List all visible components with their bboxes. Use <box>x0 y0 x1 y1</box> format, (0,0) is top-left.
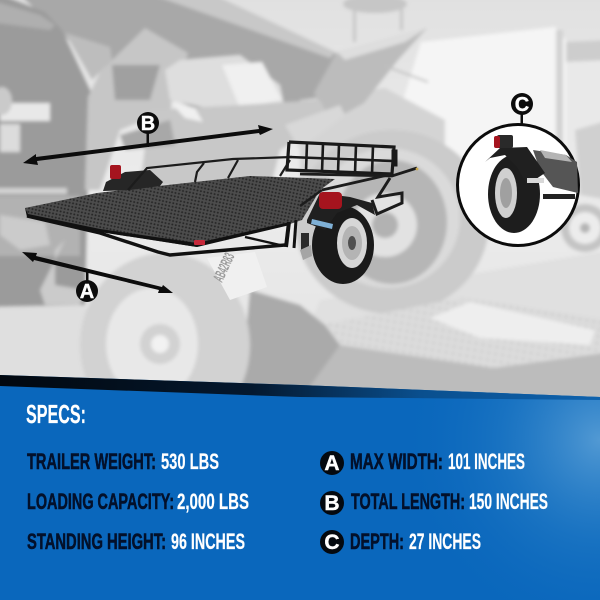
right wheel <box>312 206 374 284</box>
background photo: motorcycle scene <box>0 0 600 437</box>
badge A: A <box>80 281 94 303</box>
red tail light <box>319 192 342 209</box>
spec: trailer weight: TRAILER WEIGHT: <box>27 449 156 474</box>
palm tree <box>343 0 407 42</box>
front deck <box>25 193 290 247</box>
rear deck <box>97 176 335 224</box>
blue sticker <box>311 219 333 229</box>
inset tail light <box>494 135 513 148</box>
spec C: depth: 27 INCHES <box>409 529 481 554</box>
licence plate <box>207 250 267 300</box>
motorcycle body <box>85 28 188 190</box>
hitch coupler <box>300 233 312 260</box>
spec A: max width <box>320 449 525 475</box>
arrow B <box>23 112 273 165</box>
spec: standing height: 96 INCHES <box>171 529 245 554</box>
badge C <box>511 93 533 116</box>
foreground foggy tyre <box>80 253 250 437</box>
ramp with diamond plate <box>322 298 600 368</box>
spec B: total length: TOTAL LENGTH: <box>351 489 465 514</box>
heading: SPECS: <box>26 399 86 429</box>
spec: loading capacity: 2,000 LBS <box>177 489 249 514</box>
spec A: max width: 101 INCHES <box>448 449 525 474</box>
head gate <box>287 142 397 174</box>
car <box>0 0 95 310</box>
motorcycle rear wheel <box>295 130 489 314</box>
spec C: depth: DEPTH: <box>350 529 404 554</box>
right side rail <box>300 168 418 214</box>
inset tyre <box>488 155 540 233</box>
licence plate: AB42R83 <box>210 250 238 285</box>
spec C: depth: C <box>324 531 340 554</box>
spec B: total length: B <box>324 492 340 515</box>
arrow A <box>22 252 173 303</box>
badge A <box>76 280 98 303</box>
inset circle C: depth detail <box>458 93 578 246</box>
frame rails <box>27 216 296 255</box>
left rear fender and light <box>103 165 163 191</box>
spec: loading capacity: LOADING CAPACITY: <box>27 489 174 514</box>
spec C: depth <box>320 529 481 554</box>
ground <box>0 305 100 380</box>
foreground linkage <box>0 215 85 305</box>
spec B: total length: 150 INCHES <box>469 489 548 514</box>
right fender <box>307 193 375 230</box>
blue specs panel <box>0 375 600 600</box>
spec: trailer weight: 530 LBS <box>161 449 219 474</box>
trailer <box>25 142 418 284</box>
spec: standing height: STANDING HEIGHT: <box>27 529 166 554</box>
lower building wall <box>300 88 445 190</box>
badge C: C <box>515 94 529 116</box>
inset fender <box>485 147 545 185</box>
inset rear deck <box>533 150 578 193</box>
badge B <box>137 112 159 135</box>
white building <box>400 27 566 200</box>
side rail <box>128 157 292 190</box>
badge B: B <box>141 113 155 135</box>
spec A: max width: MAX WIDTH: <box>350 449 443 474</box>
spec A: max width: A <box>324 452 340 475</box>
background motorcycle wheel <box>561 120 600 252</box>
building roof <box>20 0 350 130</box>
